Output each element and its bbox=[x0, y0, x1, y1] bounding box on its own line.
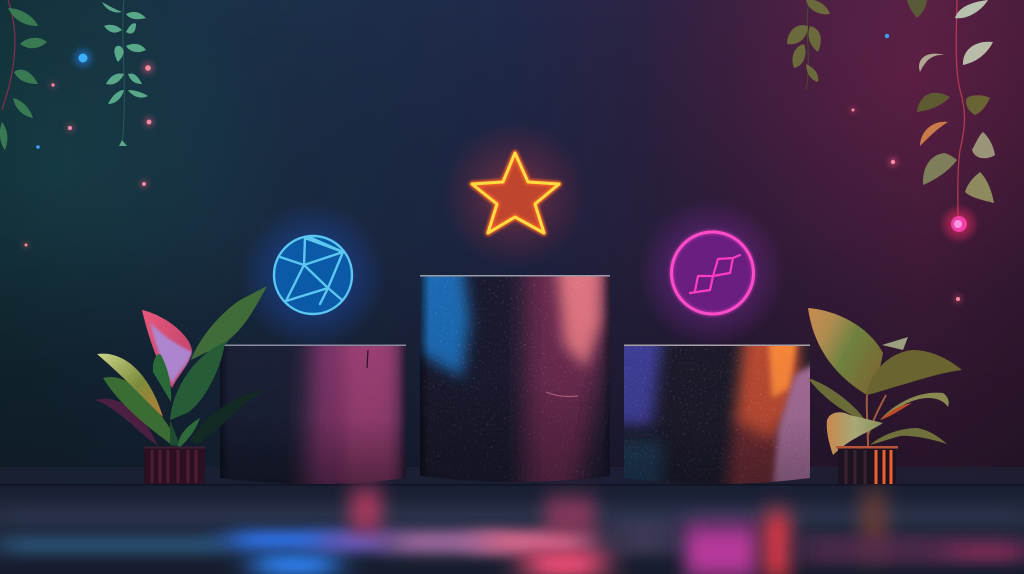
right hanging vines bbox=[787, 0, 995, 224]
neon blue circle icon bbox=[239, 202, 387, 350]
pot: left bbox=[144, 446, 205, 484]
leaves: right bbox=[808, 308, 962, 484]
pedestal: left bbox=[220, 344, 406, 484]
neon star icon bbox=[441, 121, 589, 269]
neon pink circle icon bbox=[638, 199, 786, 347]
right potted plant bbox=[808, 308, 962, 484]
left potted plant bbox=[95, 286, 268, 484]
pedestal: center bbox=[420, 275, 610, 482]
fairy lights bbox=[23, 34, 979, 303]
left hanging vines bbox=[0, 0, 148, 150]
reflective floor bbox=[0, 467, 1024, 574]
glowing bulb on vine bbox=[939, 204, 979, 244]
leaves: left bbox=[95, 286, 268, 484]
pedestal: right bbox=[624, 344, 810, 484]
pot: right bbox=[836, 446, 898, 484]
